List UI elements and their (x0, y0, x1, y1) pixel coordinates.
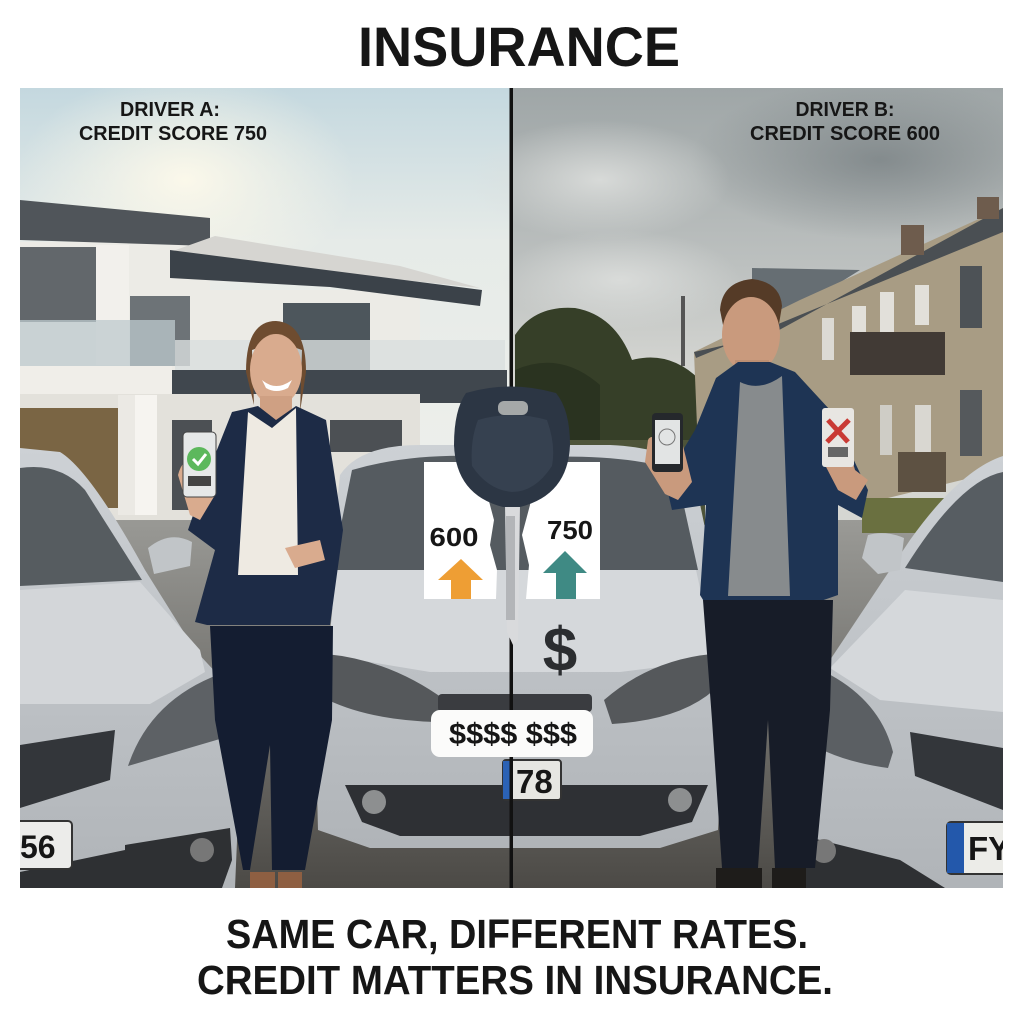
icon: car key (454, 386, 570, 645)
title: INSURANCE (358, 15, 680, 78)
divider line (510, 88, 513, 888)
premium price label (431, 710, 593, 757)
icon: phone with green check (183, 432, 216, 497)
icon: phone with red cross (822, 408, 854, 467)
label: driver A (80, 102, 266, 140)
label: driver B (750, 102, 940, 140)
car: centre vehicle: 78 (516, 763, 553, 800)
panel: driver B background with apartment building (513, 88, 1003, 888)
label: driver A: CREDIT SCORE 750 (79, 123, 267, 145)
panel: driver A background with modern house (15, 70, 511, 888)
caption: CREDIT MATTERS IN INSURANCE. (197, 957, 833, 1003)
score card: 750 with teal arrow: 750 (547, 515, 593, 545)
label: driver B: DRIVER B: (796, 99, 894, 121)
icon: phone with app screen (652, 413, 683, 472)
person: driver B (645, 279, 868, 888)
car: left vehicle (8, 448, 240, 888)
car: centre vehicle (316, 445, 722, 848)
person: driver A (178, 321, 343, 888)
premium price label: $$$$ $$$ (449, 718, 577, 751)
car: right vehicle: FY (968, 830, 1010, 867)
panel: comparison photo (8, 70, 1024, 888)
score card: 750 with teal arrow (522, 462, 600, 599)
score card: 600 with orange arrow (424, 462, 497, 599)
score card: 600 with orange arrow: 600 (430, 522, 478, 552)
label: driver A: DRIVER A: (120, 99, 220, 121)
caption (197, 911, 833, 1003)
dollar sign: $ (543, 616, 577, 685)
caption: SAME CAR, DIFFERENT RATES. (226, 911, 808, 957)
label: driver B: CREDIT SCORE 600 (750, 123, 940, 145)
car: left vehicle: 56 (20, 829, 56, 865)
car: right vehicle (806, 456, 1003, 888)
